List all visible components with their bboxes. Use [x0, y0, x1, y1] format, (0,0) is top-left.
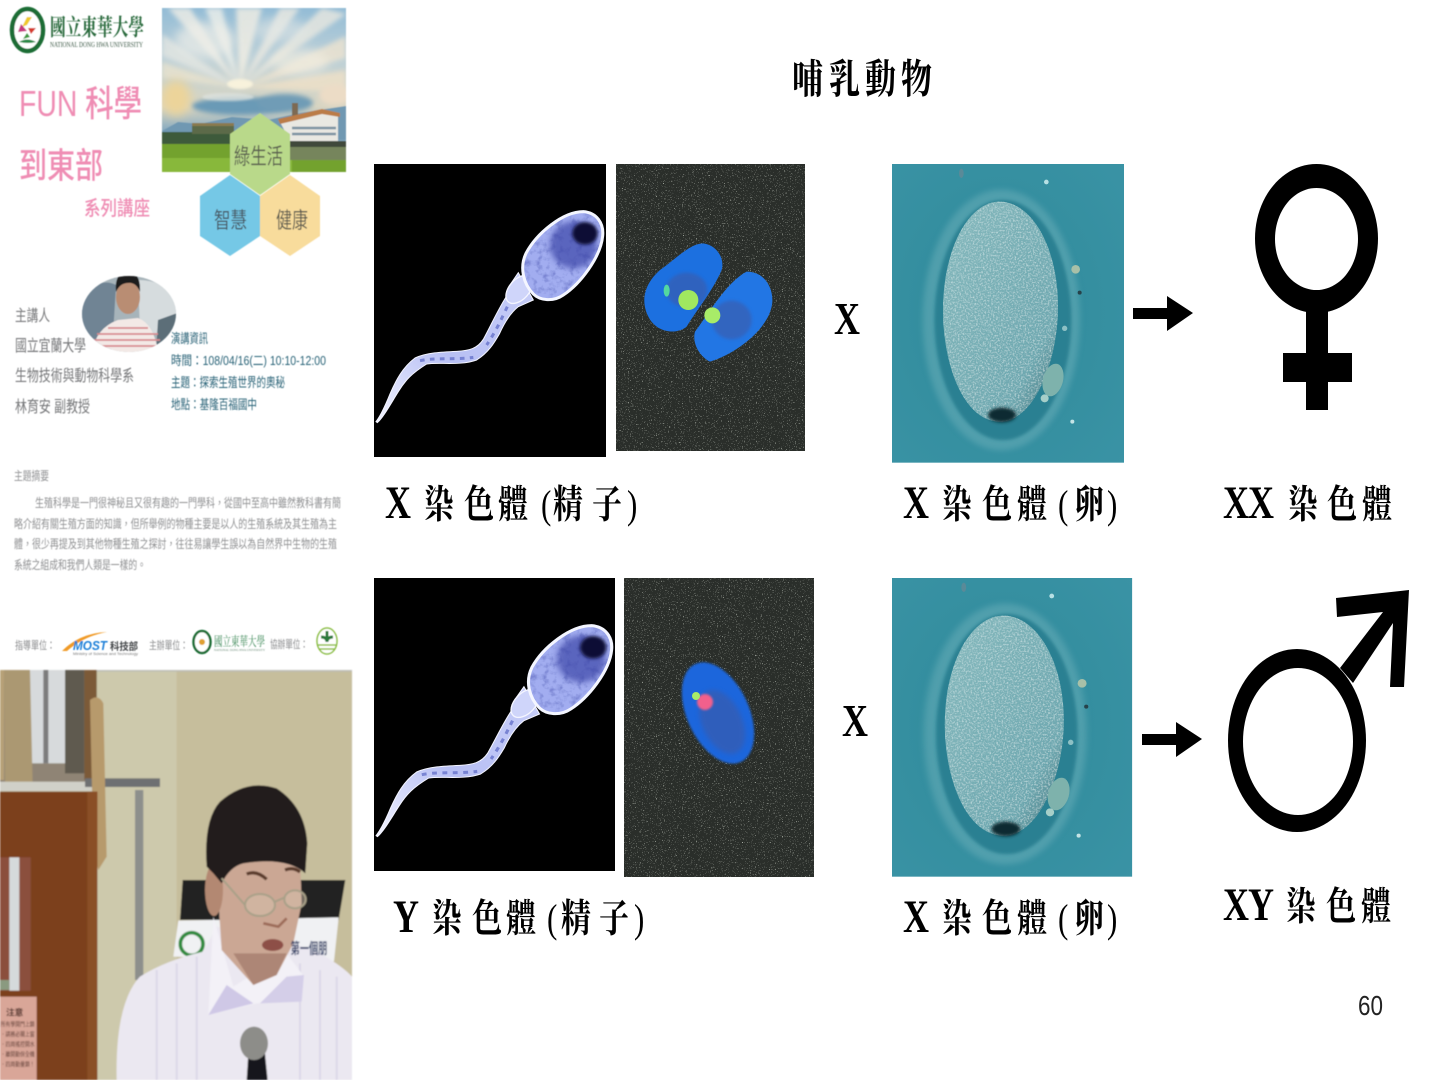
lecture information: 主題：探索生殖世界的奧秘: [171, 375, 285, 390]
label: X 染色體 (卵): X: [903, 478, 929, 529]
multiply sign: bottom row: X: [842, 695, 868, 746]
lecture information: [171, 331, 326, 412]
label: Y 染色體 (精子): 染色體: [432, 887, 536, 943]
panel: speaker video frame: [0, 670, 352, 1080]
label: X 染色體 (精子): 染色體: [424, 473, 528, 529]
multiply sign: top row: X: [834, 293, 860, 344]
hexagon: 智慧: 智慧: [214, 208, 247, 233]
sponsors footer: 國立東華大學: [214, 631, 265, 650]
speaker info: 生物技術與動物科學系: [15, 367, 134, 385]
label: XY 染色體: 染色體: [1286, 875, 1391, 931]
panel: lecture poster: [12, 8, 351, 656]
arrow: bottom row: [1142, 722, 1202, 757]
label: Y 染色體 (精子): (: [547, 896, 557, 941]
sponsors footer: [15, 628, 337, 656]
label: Y 染色體 (精子): 精子: [561, 887, 629, 943]
university logo: NATIONAL DONG HWA UNIVERSITY: [50, 41, 143, 49]
panel: speaker video frame: ．四周搖控開水: [1, 1041, 35, 1049]
campus photo: [161, 8, 351, 172]
label: XX 染色體: XX: [1223, 478, 1274, 529]
sponsors footer: 指導單位：: [15, 638, 55, 652]
speaker info: [15, 307, 134, 416]
page number: 60: [1358, 990, 1383, 1021]
title: FUN 科學 到東部: [19, 83, 150, 220]
abstract: 體，很少再提及到其他物種生殖之探討，往往易讓學生誤以為自然界中生物的生殖: [14, 536, 337, 551]
hexagon: 智慧: [200, 175, 260, 256]
university logo: 國立東華大學: [50, 9, 144, 42]
label: X 染色體 (卵), bottom row: X: [903, 892, 929, 943]
panel: speaker video frame: ．請務必關上窗: [1, 1031, 35, 1039]
title: FUN 科學 到東部: 系列講座: [84, 197, 150, 220]
panel: speaker video frame: 第一個朋: [291, 939, 327, 957]
lecture information: 時間：108/04/16(二) 10:10-12:00: [171, 353, 326, 368]
image: X egg, bottom row: [892, 578, 1132, 877]
abstract: 生殖科學是一門很神秘且又很有趣的一門學科，從國中至高中雖然教科書有簡: [35, 495, 341, 510]
icon: female symbol: [1255, 164, 1378, 410]
label: X 染色體 (精子): ): [627, 482, 637, 527]
lecture information: 地點：基隆百福國中: [171, 397, 257, 412]
panel: speaker video frame: 所有學開門上鎖: [1, 1021, 35, 1029]
university logo: [12, 9, 144, 51]
label: X 染色體 (卵), bottom row: ): [1107, 896, 1117, 941]
image: X egg: [892, 164, 1124, 463]
label: X 染色體 (精子): (: [541, 482, 551, 527]
label: XY 染色體: XY: [1223, 880, 1274, 931]
sponsors footer: MOST: [73, 638, 108, 653]
image: Y sperm: [374, 578, 615, 871]
label: X 染色體 (卵), bottom row: 染色體: [942, 887, 1047, 943]
panel: speaker video frame: ．離開勤保全機: [1, 1051, 35, 1059]
abstract: 主題摘要: [14, 468, 49, 483]
speaker portrait: [81, 275, 177, 352]
arrow: top row: [1133, 296, 1193, 331]
abstract: [14, 468, 341, 572]
abstract: 略介紹有關生殖方面的知識，但所舉例的物種主要是以人的生殖系統及其生殖為主: [14, 516, 337, 531]
label: Y 染色體 (精子): ): [634, 896, 644, 941]
label: XX 染色體: 染色體: [1288, 473, 1392, 529]
image: X chromosome FISH: [616, 164, 805, 451]
title: FUN 科學 到東部: 到東部: [19, 147, 103, 186]
sponsors footer: Ministry of Science and Technology: [73, 651, 138, 656]
speaker info: 主講人: [15, 307, 50, 325]
label: X 染色體 (卵): (: [1058, 482, 1068, 527]
hexagon: 健康: 健康: [276, 208, 308, 233]
panel: speaker video frame: 注意: [6, 1006, 24, 1017]
label: X 染色體 (卵), bottom row: 卵: [1074, 887, 1104, 943]
hexagon: 綠生活: [230, 113, 290, 195]
abstract: 系統之組成和我們人類是一樣的。: [14, 557, 146, 572]
title: FUN 科學 到東部: FUN 科學: [19, 83, 142, 124]
sponsors footer: 主辦單位：: [149, 638, 188, 652]
image: X sperm: [374, 164, 606, 457]
label: X 染色體 (精子): X: [385, 478, 411, 529]
label: X 染色體 (卵): 染色體: [942, 473, 1047, 529]
label: X 染色體 (精子): 精子: [553, 473, 622, 529]
panel: speaker video frame: ．四周勤量鎖！: [1, 1061, 35, 1069]
sponsors footer: 協辦單位：: [270, 637, 308, 651]
title: 哺乳動物: 哺乳動物: [792, 48, 932, 105]
lecture information: 演講資訊: [171, 331, 208, 346]
hexagon: 健康: [260, 175, 320, 256]
icon: male symbol: [1228, 590, 1409, 832]
sponsors footer: NATIONAL DONG HWA UNIVERSITY: [214, 648, 265, 652]
label: X 染色體 (卵): 卵: [1074, 473, 1104, 529]
speaker info: 國立宜蘭大學: [15, 337, 86, 355]
label: Y 染色體 (精子): Y: [393, 892, 419, 943]
sponsors footer: 科技部: [110, 640, 138, 653]
image: Y chromosome FISH: [624, 578, 814, 877]
label: X 染色體 (卵): ): [1107, 482, 1117, 527]
speaker info: 林育安 副教授: [15, 397, 90, 416]
hexagon: 綠生活: 綠生活: [234, 144, 283, 169]
label: X 染色體 (卵), bottom row: (: [1058, 896, 1068, 941]
